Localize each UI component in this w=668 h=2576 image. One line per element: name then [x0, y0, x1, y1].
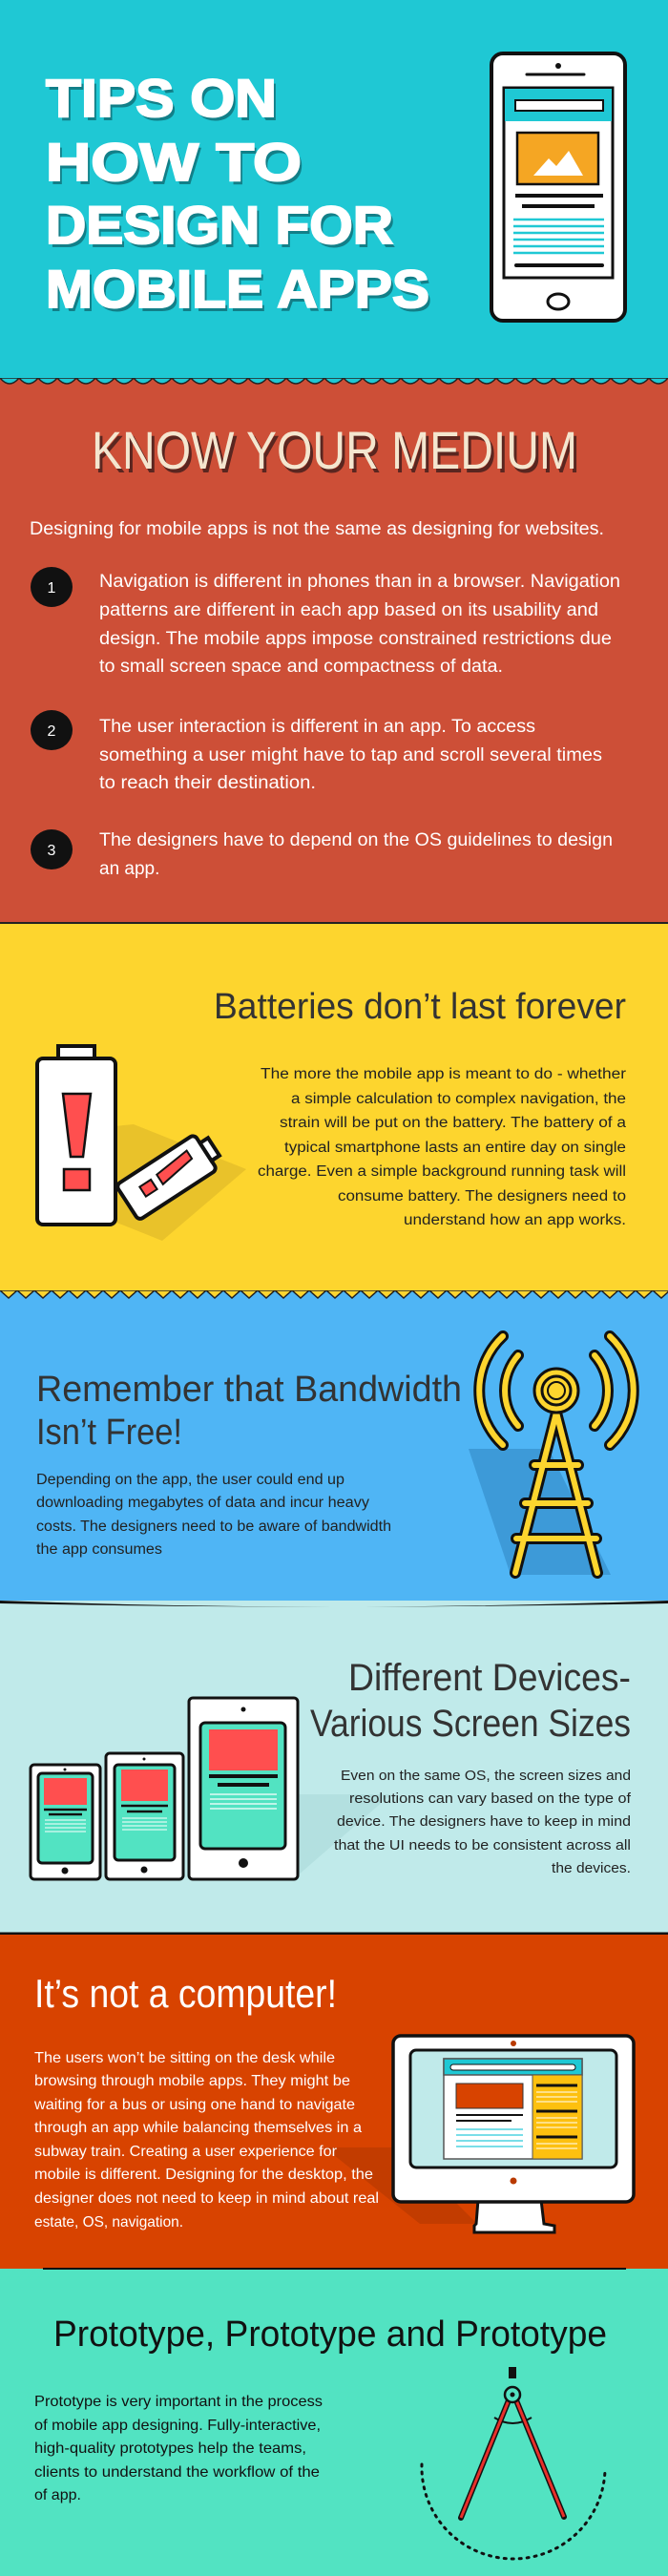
- text: batteries: understand how an app works.: [404, 1212, 626, 1228]
- text: bandwidth: the app consumes: [36, 1541, 162, 1558]
- icon: devices: [31, 1698, 391, 1879]
- text: computer: subway train. Creating a user experience for: [34, 2144, 338, 2160]
- item 2: [31, 710, 602, 793]
- heading: batteries: Batteries don’t last forever: [214, 987, 626, 1027]
- heading: devices: Different Devices-: [348, 1657, 631, 1699]
- title: MOBILE APPS: [49, 262, 432, 323]
- text: devices: device. The designers have to keep in mind: [337, 1813, 631, 1830]
- title: DESIGN FOR: [49, 199, 396, 259]
- text: prototype: Prototype is very important in the process: [34, 2394, 323, 2410]
- panel: header: [0, 0, 668, 387]
- title: HOW TO: [46, 132, 302, 192]
- text: batteries: a simple calculation to complex navigation, the: [291, 1091, 626, 1107]
- text: batteries: charge. Even a simple background running task will: [258, 1163, 626, 1180]
- text: computer: designer does not need to keep in mind about real: [34, 2190, 379, 2207]
- text: computer: through an app while balancing themselves in a: [34, 2120, 362, 2136]
- panel: batteries: [0, 923, 668, 1300]
- text: bandwidth: [36, 1472, 391, 1558]
- panel: devices: [0, 1601, 668, 1935]
- text: batteries: strain will be put on the battery. The battery of a: [280, 1115, 626, 1131]
- item 2: something a user might have to tap and scroll several times: [99, 745, 602, 765]
- item 2: The user interaction is different in an app. To access: [99, 717, 535, 737]
- intro text: Designing for mobile apps is not the same as designing for websites.: [30, 519, 604, 539]
- text: computer: estate, OS, navigation.: [34, 2214, 183, 2230]
- item 3: 3: [48, 843, 56, 859]
- text: batteries: [258, 1066, 626, 1228]
- text: prototype: of app.: [34, 2487, 81, 2503]
- title: [46, 68, 432, 323]
- item 1: patterns are different in each app based on its usability and: [99, 600, 598, 620]
- text: bandwidth: downloading megabytes of data and incur heavy: [36, 1495, 369, 1511]
- item 3: The designers have to depend on the OS guidelines to design: [99, 830, 613, 850]
- text: devices: the devices.: [552, 1860, 631, 1876]
- icon: batteries: [37, 1046, 246, 1241]
- panel: prototype: [0, 2269, 668, 2576]
- text: bandwidth: Depending on the app, the user could end up: [36, 1472, 344, 1488]
- text: prototype: high-quality prototypes help the teams,: [34, 2440, 306, 2457]
- text: devices: Even on the same OS, the screen sizes and: [341, 1768, 631, 1784]
- heading: know your medium: KNOW YOUR MEDIUM: [92, 420, 577, 480]
- heading: devices: Various Screen Sizes: [310, 1703, 631, 1745]
- text: batteries: The more the mobile app is meant to do - whether: [261, 1066, 626, 1082]
- heading: computer: It’s not a computer!: [34, 1971, 337, 2016]
- heading: know your medium: KNOW YOUR MEDIUM: [94, 424, 580, 484]
- heading: devices: [310, 1657, 631, 1745]
- heading: bandwidth: Remember that Bandwidth: [36, 1370, 462, 1410]
- title: DESIGN FOR: [46, 195, 393, 255]
- text: computer: browsing through mobile apps. They might be: [34, 2073, 350, 2089]
- item 2: 2: [48, 723, 56, 740]
- item 3: [31, 829, 613, 879]
- icon: phone: [491, 53, 625, 321]
- heading: prototype: Prototype, Prototype and Prototype: [53, 2314, 607, 2355]
- item 1: design. The mobile apps impose constrained restrictions due: [99, 629, 612, 649]
- icon: monitor: [324, 2036, 634, 2232]
- item 1: [31, 567, 620, 677]
- panel: bandwidth: [0, 1300, 668, 1602]
- heading: bandwidth: [36, 1370, 462, 1453]
- text: batteries: consume battery. The designers need to: [338, 1188, 626, 1204]
- title: MOBILE APPS: [46, 259, 429, 319]
- text: prototype: clients to understand the workflow of the: [34, 2464, 320, 2481]
- item 3: an app.: [99, 859, 159, 879]
- text: prototype: [34, 2394, 323, 2503]
- panel: not a computer: [0, 1935, 668, 2269]
- text: computer: mobile is different. Designing for the desktop, the: [34, 2167, 373, 2183]
- text: devices: [334, 1768, 632, 1876]
- text: devices: that the UI needs to be consistent across all: [334, 1837, 631, 1853]
- text: computer: The users won’t be sitting on the desk while: [34, 2050, 335, 2066]
- title: TIPS ON: [46, 68, 277, 128]
- panel: know your medium: [0, 387, 668, 924]
- text: devices: resolutions can vary based on the type of: [349, 1791, 632, 1807]
- title: HOW TO: [49, 136, 304, 196]
- text: batteries: typical smartphone lasts an entire day on single: [284, 1140, 626, 1156]
- item 2: to reach their destination.: [99, 773, 316, 793]
- icon: tower: [469, 1336, 634, 1575]
- heading: bandwidth: Isn’t Free!: [36, 1413, 182, 1453]
- item 1: to small screen space and compactness of data.: [99, 657, 503, 677]
- text: computer: waiting for a bus or using one hand to navigate: [33, 2097, 355, 2113]
- title: TIPS ON: [49, 72, 280, 132]
- text: bandwidth: costs. The designers need to be aware of bandwidth: [36, 1518, 391, 1535]
- item 1: Navigation is different in phones than in a browser. Navigation: [99, 572, 620, 592]
- icon: compass: [422, 2367, 605, 2559]
- text: prototype: of mobile app designing. Fully-interactive,: [34, 2418, 321, 2434]
- item 1: 1: [48, 580, 56, 597]
- text: computer: [33, 2050, 379, 2230]
